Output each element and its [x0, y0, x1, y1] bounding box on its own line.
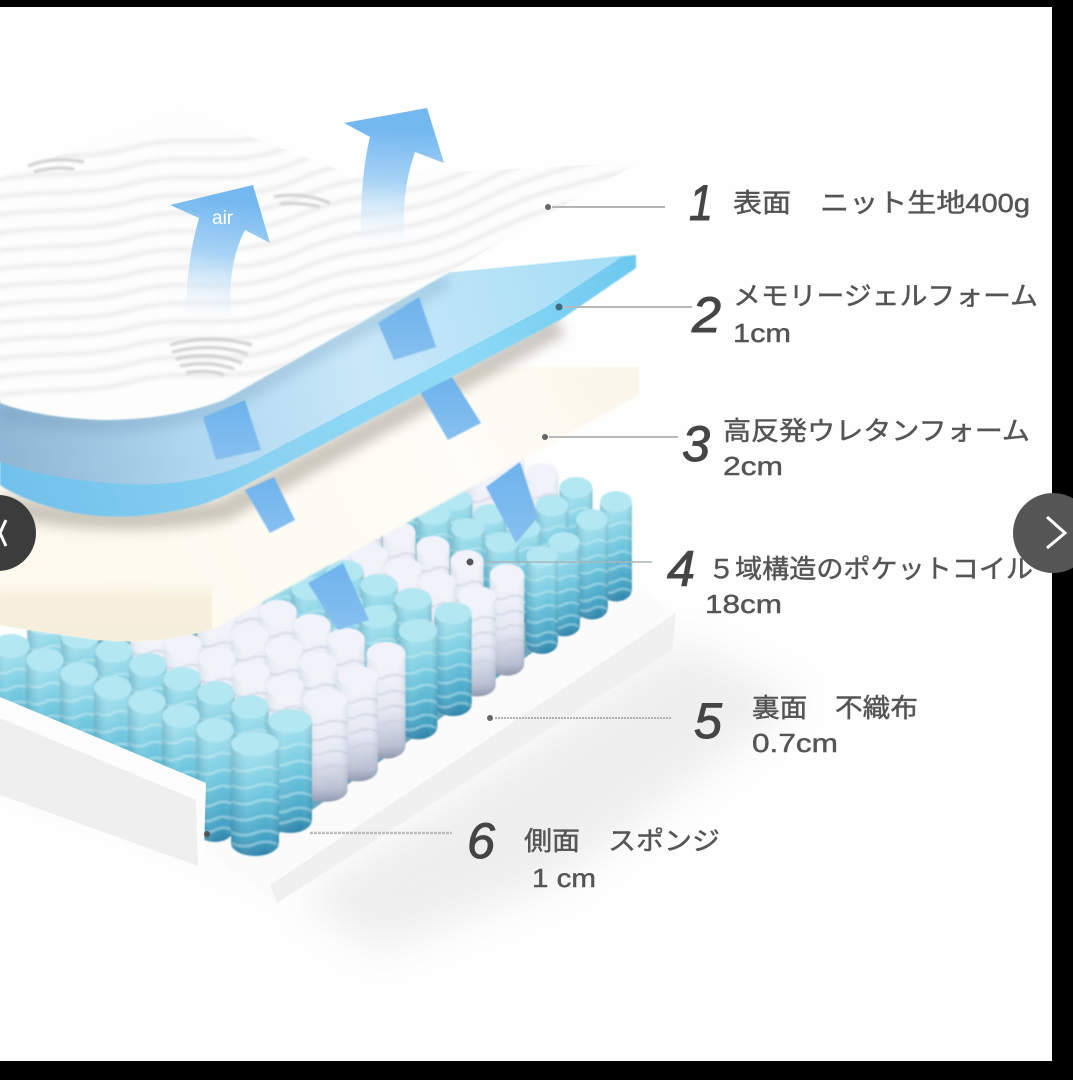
item 6: side sponge: 6 — [467, 813, 495, 869]
layer 6: side sponge face — [0, 697, 277, 908]
item 2: memory gel foam: メモリージェルフォーム — [733, 281, 1038, 311]
item 1: surface knit — [689, 175, 1030, 231]
item 4: pocket coil: 4 — [667, 541, 695, 597]
item 2: memory gel foam — [691, 281, 1038, 348]
leader line 1 — [545, 204, 665, 210]
item 5: non-woven back: 裏面 不織布 — [752, 693, 918, 723]
item 5: non-woven back: 0.7cm — [752, 728, 838, 758]
layer 5: base non-woven board — [200, 590, 676, 903]
item 3: urethane foam — [682, 416, 1030, 481]
item 2: memory gel foam: 2 — [691, 287, 721, 343]
nav button: previous — [0, 495, 36, 571]
board shadow — [300, 640, 800, 950]
leader line 2 — [556, 304, 692, 310]
item 4: pocket coil: 18cm — [705, 589, 782, 619]
item 5: non-woven back — [694, 693, 918, 758]
airflow strips over foam — [245, 377, 538, 543]
item 3: urethane foam: 高反発ウレタンフォーム — [723, 416, 1030, 446]
item 5: non-woven back: 5 — [694, 693, 722, 749]
item 6: side sponge — [467, 813, 720, 893]
leader line 3 — [542, 434, 678, 440]
item 4: pocket coil — [667, 541, 1033, 619]
airflow strips over gel foam — [203, 297, 436, 460]
air label: air — [212, 208, 234, 229]
leader line 6 — [204, 831, 452, 837]
layer 3: high-resilience urethane foam — [0, 325, 639, 641]
item 1: surface knit: 1 — [689, 175, 713, 231]
item 3: urethane foam: 2cm — [723, 451, 783, 481]
leader line 4 — [466, 558, 652, 566]
item 1: surface knit: 表面 ニット生地400g — [733, 188, 1030, 218]
layer 4: pocket coil springs — [0, 435, 632, 856]
arrow: left airflow — [170, 185, 270, 317]
item 3: urethane foam: 3 — [682, 416, 710, 472]
airflow strip over coils — [308, 563, 369, 630]
item 6: side sponge: 1 cm — [532, 863, 596, 893]
nav button: next — [1013, 493, 1073, 573]
item 4: pocket coil: ５域構造のポケットコイル — [708, 554, 1033, 584]
item 2: memory gel foam: 1cm — [733, 318, 791, 348]
layer 1: knit surface fabric — [0, 137, 627, 421]
layer 2: memory gel foam — [0, 255, 636, 517]
leader line 5 — [487, 715, 672, 721]
arrow: right airflow — [344, 108, 444, 245]
item 6: side sponge: 側面 スポンジ — [524, 826, 720, 856]
